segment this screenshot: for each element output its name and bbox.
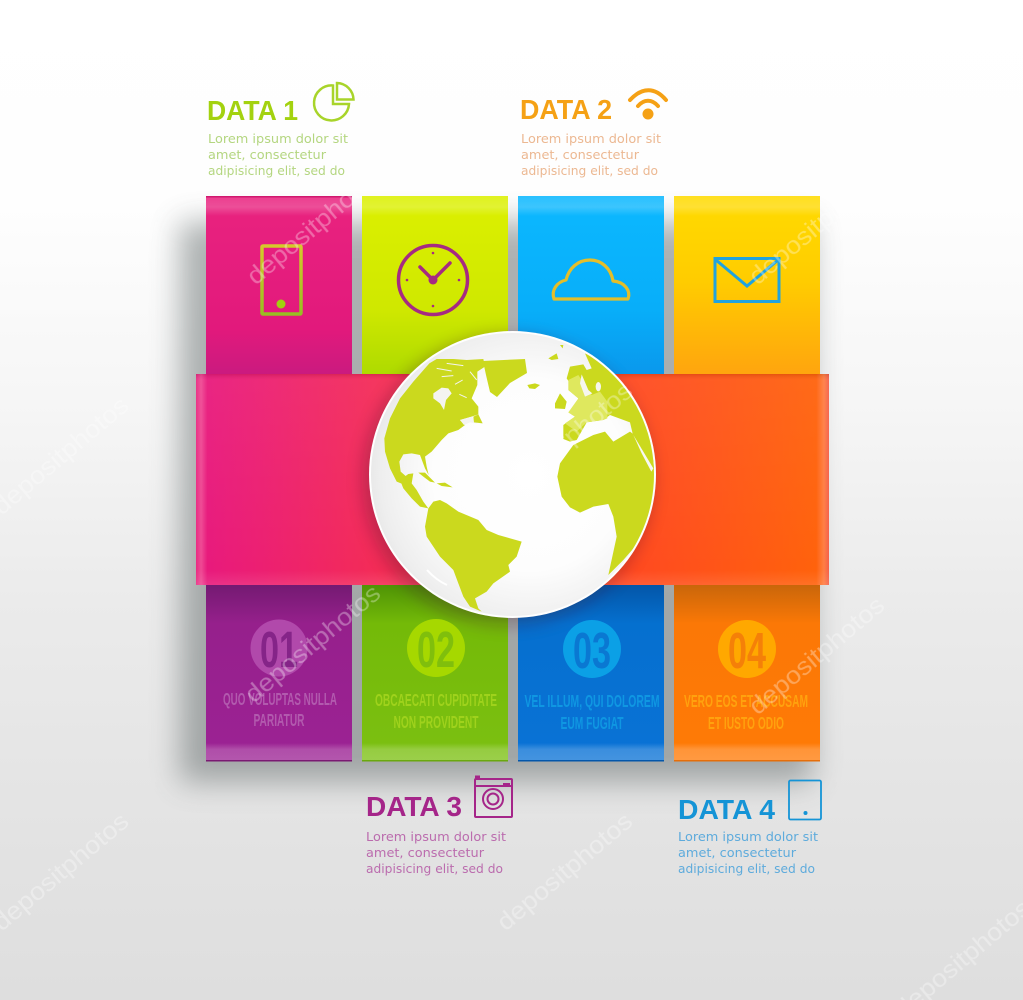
panel: column 1 bottom, purple [206, 585, 352, 762]
icon: tablet [789, 780, 821, 820]
panel: column 2 top, lime [362, 196, 508, 386]
panel: column 4 top, yellow [674, 196, 820, 386]
body text: data 4: amet, consectetur [678, 845, 797, 860]
globe [369, 331, 667, 618]
caption: column 1 [223, 689, 337, 730]
heading block: data 4: DATA 4 [678, 794, 775, 825]
soft shadow behind bars [180, 222, 812, 782]
number badge 02: 02 [417, 621, 455, 678]
body text: data 1: Lorem ipsum dolor sit [208, 131, 348, 146]
body text: data 4 [678, 829, 818, 876]
number badge 03 [563, 620, 621, 679]
caption: column 2 [375, 690, 497, 732]
land: North America [384, 359, 485, 492]
body text: data 3: Lorem ipsum dolor sit [366, 829, 506, 844]
watermark: depositphotos [744, 591, 890, 721]
icon: clock [398, 246, 468, 314]
heading block: data 1: DATA 1 [207, 95, 298, 126]
globe highlight arc [427, 570, 447, 585]
body text: data 1: adipisicing elit, sed do [208, 163, 345, 178]
body text: data 3 [366, 829, 506, 876]
icon: camera [475, 776, 512, 817]
heading block: data 1 [207, 95, 348, 178]
icon: envelope [715, 258, 779, 302]
caption: column 3: EUM FUGIAT [560, 713, 624, 733]
panel: column 2 bottom, green [362, 585, 508, 762]
map: continents [384, 345, 667, 612]
globe shadow [362, 334, 654, 626]
watermark: depositphotos [492, 377, 638, 507]
land: Central and South America [400, 473, 522, 612]
body text: data 4: Lorem ipsum dolor sit [678, 829, 818, 844]
heading block: data 2: DATA 2 [520, 94, 612, 125]
body text: data 1: amet, consectetur [208, 147, 327, 162]
heading block: data 3 [366, 791, 506, 876]
icon: wifi [630, 90, 666, 120]
body text: data 2: Lorem ipsum dolor sit [521, 131, 661, 146]
body text: data 2: adipisicing elit, sed do [521, 163, 658, 178]
panel: column 3 top, blue [518, 196, 664, 386]
icon: pie chart [314, 83, 354, 120]
caption: column 3: VEL ILLUM, QUI DOLOREM [524, 691, 660, 711]
land: Greenland [483, 359, 527, 397]
icon: cloud [553, 260, 629, 299]
body text: data 1 [208, 131, 348, 178]
panel: horizontal ribbon [196, 374, 829, 585]
watermark: depositphotos [744, 161, 890, 291]
number badge 04: 04 [728, 622, 766, 679]
caption: column 4: VERO EOS ET ACCUSAM [684, 691, 808, 711]
number badge 01: 01 [260, 621, 298, 678]
caption: column 4 [684, 691, 808, 733]
heading block: data 3: DATA 3 [366, 791, 462, 822]
watermark: depositphotos [240, 579, 386, 709]
caption: column 2: OBCAECATI CUPIDITATE [375, 690, 497, 710]
body text: data 3: adipisicing elit, sed do [366, 861, 503, 876]
caption: column 3 [524, 691, 660, 733]
heading block: data 2 [520, 94, 661, 178]
panel: column 4 bottom, orange [674, 585, 820, 762]
panel: column 3 bottom, blue [518, 585, 664, 762]
number badge 02 [407, 619, 465, 678]
body text: data 2: amet, consectetur [521, 147, 640, 162]
heading block: data 4 [678, 794, 818, 876]
caption: column 1: QUO VOLUPTAS NULLA [223, 689, 337, 709]
caption: column 1: PARIATUR [254, 710, 305, 730]
icon: phone [262, 246, 301, 314]
body text: data 3: amet, consectetur [366, 845, 485, 860]
panel: column 1 top, pink [206, 196, 352, 386]
number badge 04 [718, 620, 776, 679]
number badge 03: 03 [573, 622, 611, 679]
land: Europe, Asia and Iceland [527, 345, 654, 470]
caption: column 2: NON PROVIDENT [394, 712, 479, 732]
body text: data 2 [521, 131, 661, 178]
land: Africa [557, 432, 660, 575]
watermark: depositphotos [492, 807, 638, 937]
watermark: depositphotos [242, 161, 388, 291]
caption: column 4: ET IUSTO ODIO [708, 713, 784, 733]
body text: data 4: adipisicing elit, sed do [678, 861, 815, 876]
